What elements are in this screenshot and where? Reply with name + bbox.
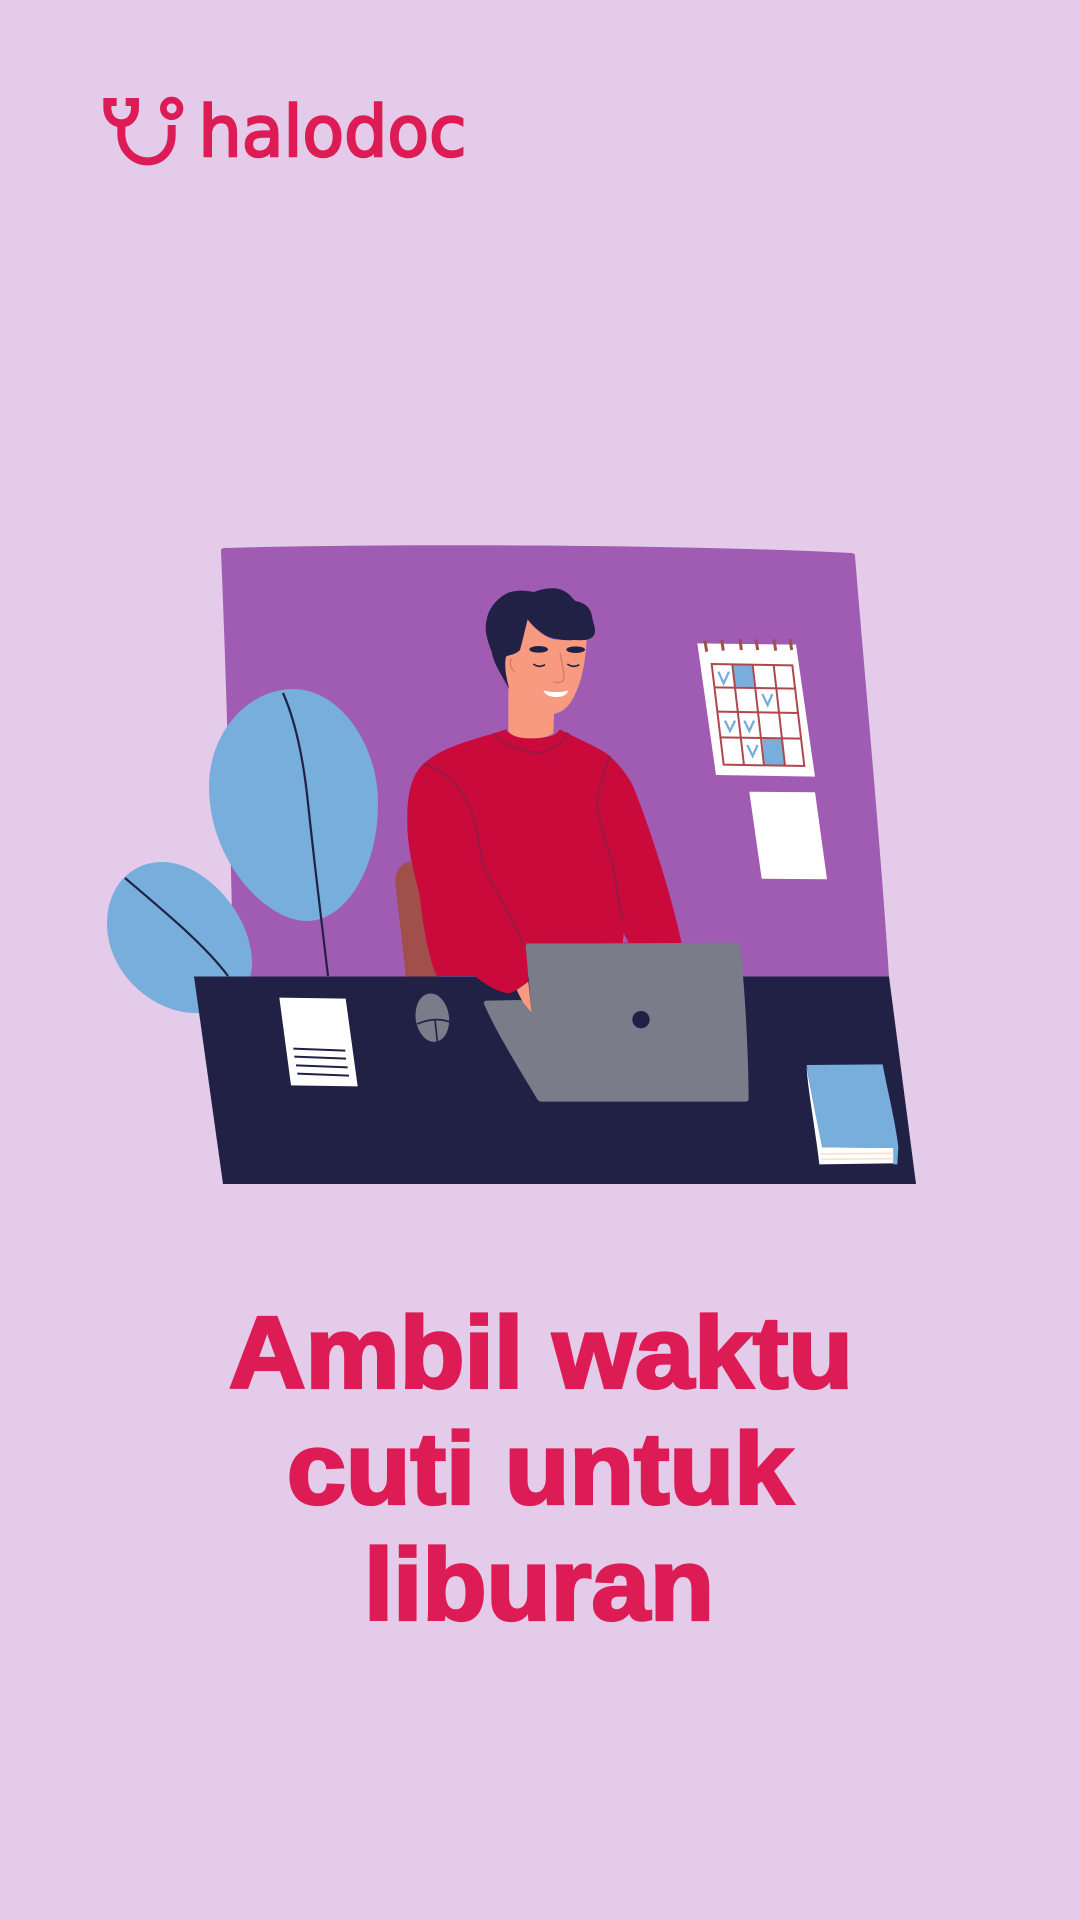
person: [407, 588, 682, 993]
title: [229, 1298, 853, 1642]
laptop: [484, 943, 749, 1102]
icon: large leaf: [209, 689, 378, 976]
sweater seams: [423, 733, 624, 943]
calendar on wall: [697, 639, 815, 777]
illustration: man working at desk: [107, 545, 916, 1184]
hair: [486, 588, 595, 689]
title: Ambil waktu: [229, 1298, 853, 1410]
chair back: [395, 862, 438, 977]
panel: purple wall: [221, 545, 889, 977]
paper document on desk: [279, 998, 358, 1086]
facial features: [510, 646, 585, 697]
logo wordmark: halodoc: [198, 91, 466, 173]
face and neck: [505, 619, 587, 739]
computer mouse: [412, 991, 452, 1044]
red sweater: [407, 729, 682, 993]
title: cuti untuk: [287, 1414, 794, 1526]
logo: halodoc: [107, 91, 466, 173]
desk: [194, 976, 916, 1184]
title: liburan: [364, 1530, 714, 1642]
white note on wall: [749, 792, 827, 879]
icon: small leaf: [107, 862, 252, 1013]
icon: stethoscope: [107, 100, 180, 161]
book: [807, 1064, 898, 1164]
